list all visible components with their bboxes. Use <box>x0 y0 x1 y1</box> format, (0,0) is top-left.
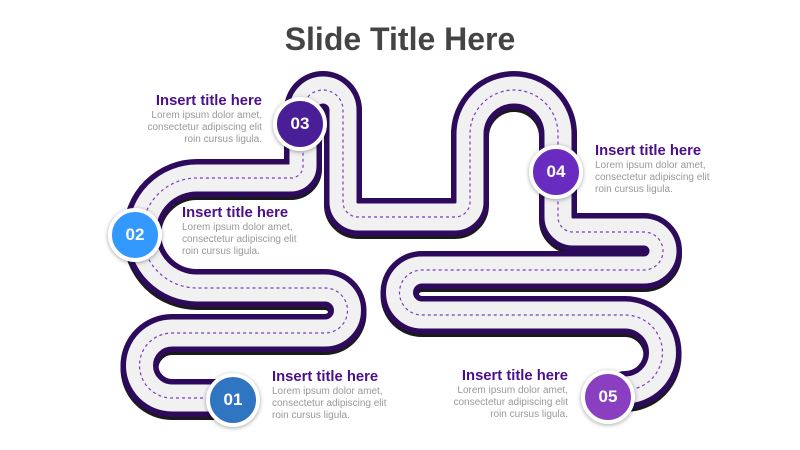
title: Slide Title Here <box>285 21 515 57</box>
marker 01 <box>206 373 260 427</box>
text 05: Lorem ipsum dolor amet, <box>457 385 568 396</box>
text 04: Insert title here <box>595 143 701 159</box>
text 03: roin cursus ligula. <box>184 134 262 145</box>
text 01: consectetur adipiscing elit <box>272 398 387 409</box>
text 05: roin cursus ligula. <box>490 409 568 420</box>
text 05: Insert title here <box>462 368 568 384</box>
marker 03 <box>273 97 327 151</box>
text 04: Lorem ipsum dolor amet, <box>595 160 706 171</box>
marker 03: 03 <box>291 114 309 133</box>
marker 04: 04 <box>547 162 565 181</box>
text 01: Insert title here <box>272 369 378 385</box>
marker 04 <box>529 145 583 199</box>
text 02 <box>182 205 297 257</box>
text 03 <box>147 93 262 145</box>
marker 02 <box>108 208 162 262</box>
text 02: consectetur adipiscing elit <box>182 234 297 245</box>
text 05: consectetur adipiscing elit <box>453 397 568 408</box>
marker 02: 02 <box>126 225 144 244</box>
text 01 <box>272 369 387 421</box>
text 03: Insert title here <box>156 93 262 109</box>
text 03: consectetur adipiscing elit <box>147 122 262 133</box>
text 02: Insert title here <box>182 205 288 221</box>
text 01: roin cursus ligula. <box>272 410 350 421</box>
marker 01: 01 <box>224 390 242 409</box>
marker 05: 05 <box>599 387 617 406</box>
text 04: consectetur adipiscing elit <box>595 172 710 183</box>
text 04 <box>595 143 710 195</box>
marker 05 <box>581 370 635 424</box>
text 05 <box>453 368 568 420</box>
text 03: Lorem ipsum dolor amet, <box>151 110 262 121</box>
text 02: roin cursus ligula. <box>182 246 260 257</box>
text 01: Lorem ipsum dolor amet, <box>272 386 383 397</box>
text 02: Lorem ipsum dolor amet, <box>182 222 293 233</box>
text 04: roin cursus ligula. <box>595 184 673 195</box>
